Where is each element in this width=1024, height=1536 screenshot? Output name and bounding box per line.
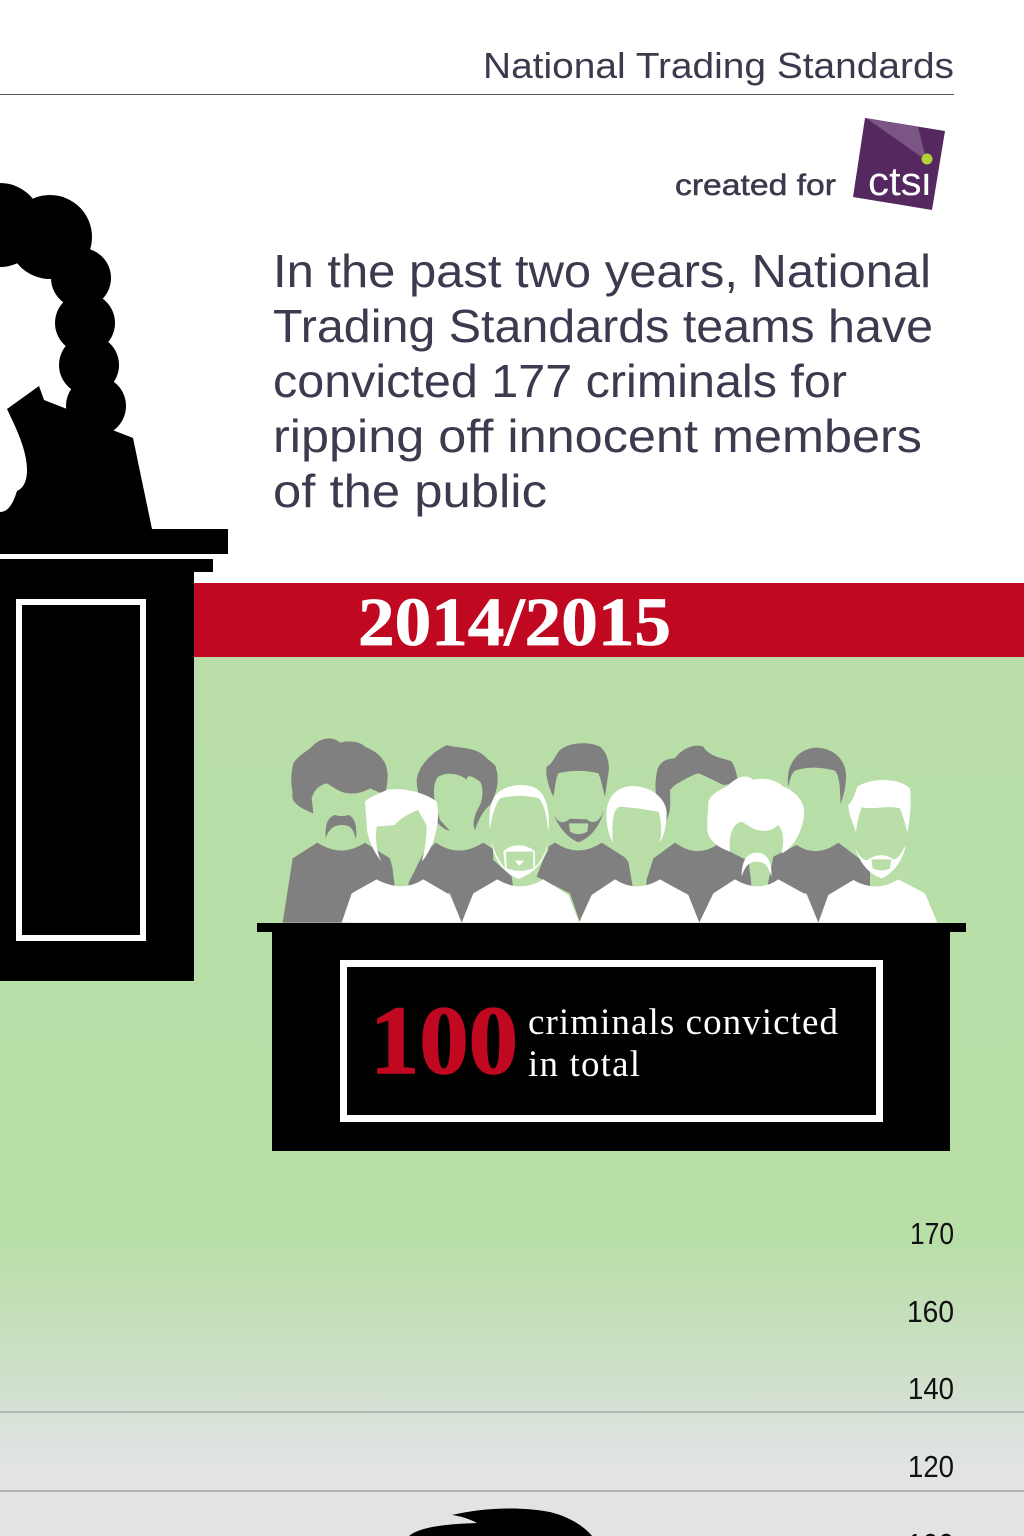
scale numbers (907, 1216, 954, 1536)
total caption: criminals convicted (528, 1002, 838, 1043)
intro text (273, 245, 933, 517)
intro text: In the past two years, National (273, 245, 931, 297)
front row: white figures (342, 777, 937, 923)
logo: ctsi (853, 118, 945, 210)
year banner (194, 583, 1024, 660)
scale numbers: 140 (908, 1371, 954, 1406)
total number: 100 (370, 987, 518, 1094)
intro text: convicted 177 criminals for (273, 355, 847, 407)
intro text: Trading Standards teams have (273, 300, 933, 352)
scale numbers: 170 (910, 1216, 954, 1251)
intro text: ripping off innocent members (273, 410, 922, 462)
year banner: 2014/2015 (358, 584, 671, 660)
total caption (528, 1002, 838, 1085)
silhouette head at bottom (409, 1508, 592, 1536)
created for label: created for (675, 169, 836, 202)
dock with total (257, 923, 966, 1151)
intro text: of the public (273, 465, 547, 517)
jury group: silhouettes (283, 738, 937, 923)
logo: ctsi: ctsi (868, 160, 931, 204)
scale numbers: 160 (907, 1294, 954, 1329)
header: organisation name: National Trading Standards (483, 45, 954, 86)
total caption: in total (528, 1044, 640, 1085)
green background panel (0, 657, 1024, 1536)
back row: grey figures (283, 738, 870, 923)
scale numbers: 120 (908, 1449, 954, 1484)
judge silhouette with bench (0, 183, 228, 981)
